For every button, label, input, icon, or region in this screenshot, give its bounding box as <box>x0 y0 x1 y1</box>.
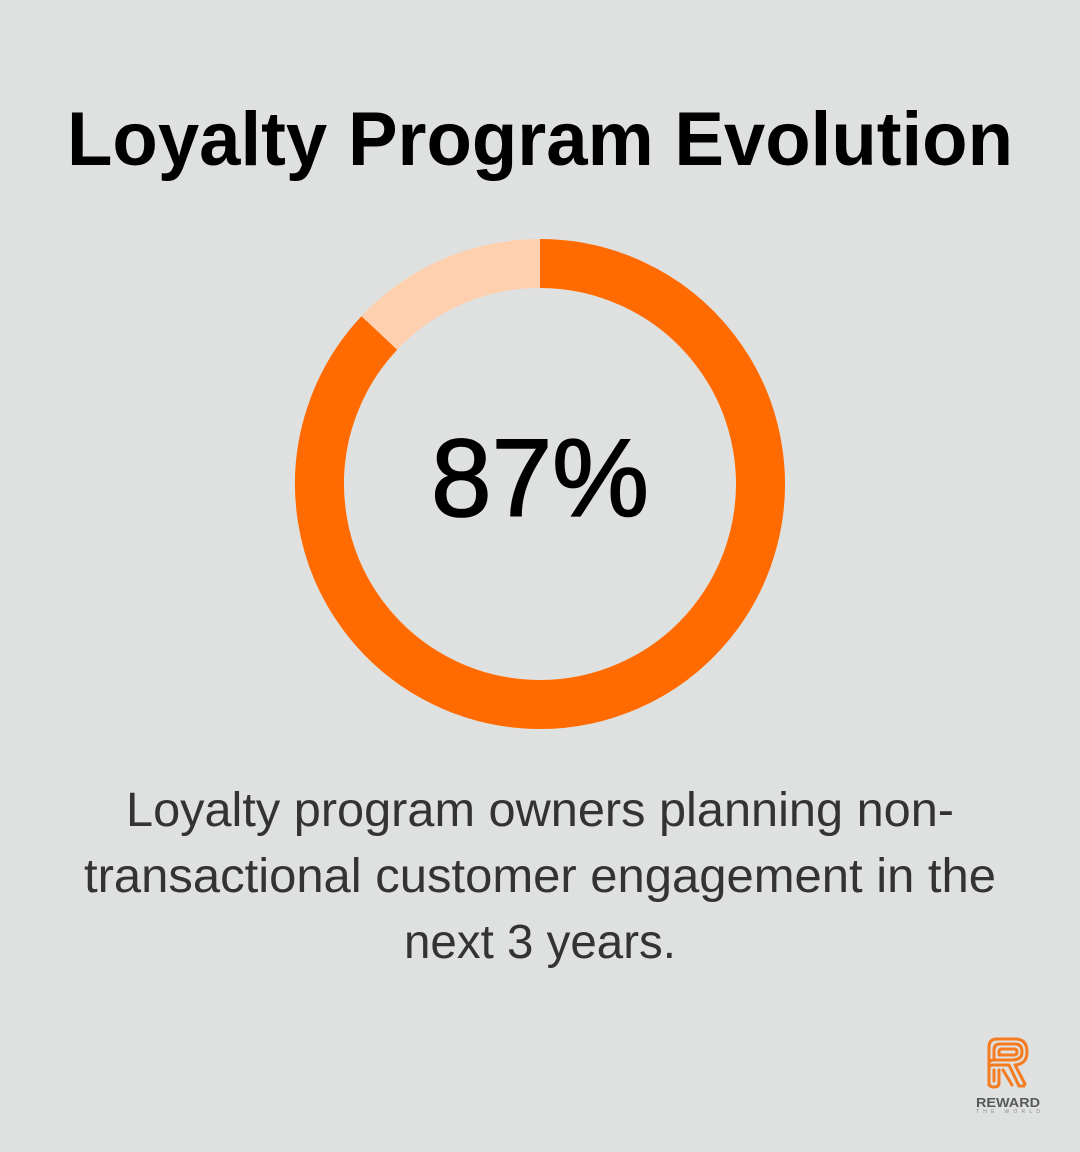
donut value label: 87% <box>431 417 649 540</box>
donut value arc: 87% <box>319 264 760 704</box>
icon: R mark <box>989 1039 1027 1087</box>
description text: Loyalty program owners planning non- <box>126 784 954 837</box>
logo tagline: THE WORLD <box>976 1109 1040 1115</box>
donut track: remaining 13% <box>320 264 760 704</box>
title: Loyalty Program Evolution <box>67 97 1013 182</box>
logo wordmark: REWARD <box>976 1096 1040 1110</box>
logo: Reward the World <box>976 1039 1040 1115</box>
donut chart: 87% <box>319 264 760 704</box>
description text: next 3 years. <box>404 916 676 969</box>
description text: transactional customer engagement in the <box>84 850 996 903</box>
description text <box>84 784 996 969</box>
